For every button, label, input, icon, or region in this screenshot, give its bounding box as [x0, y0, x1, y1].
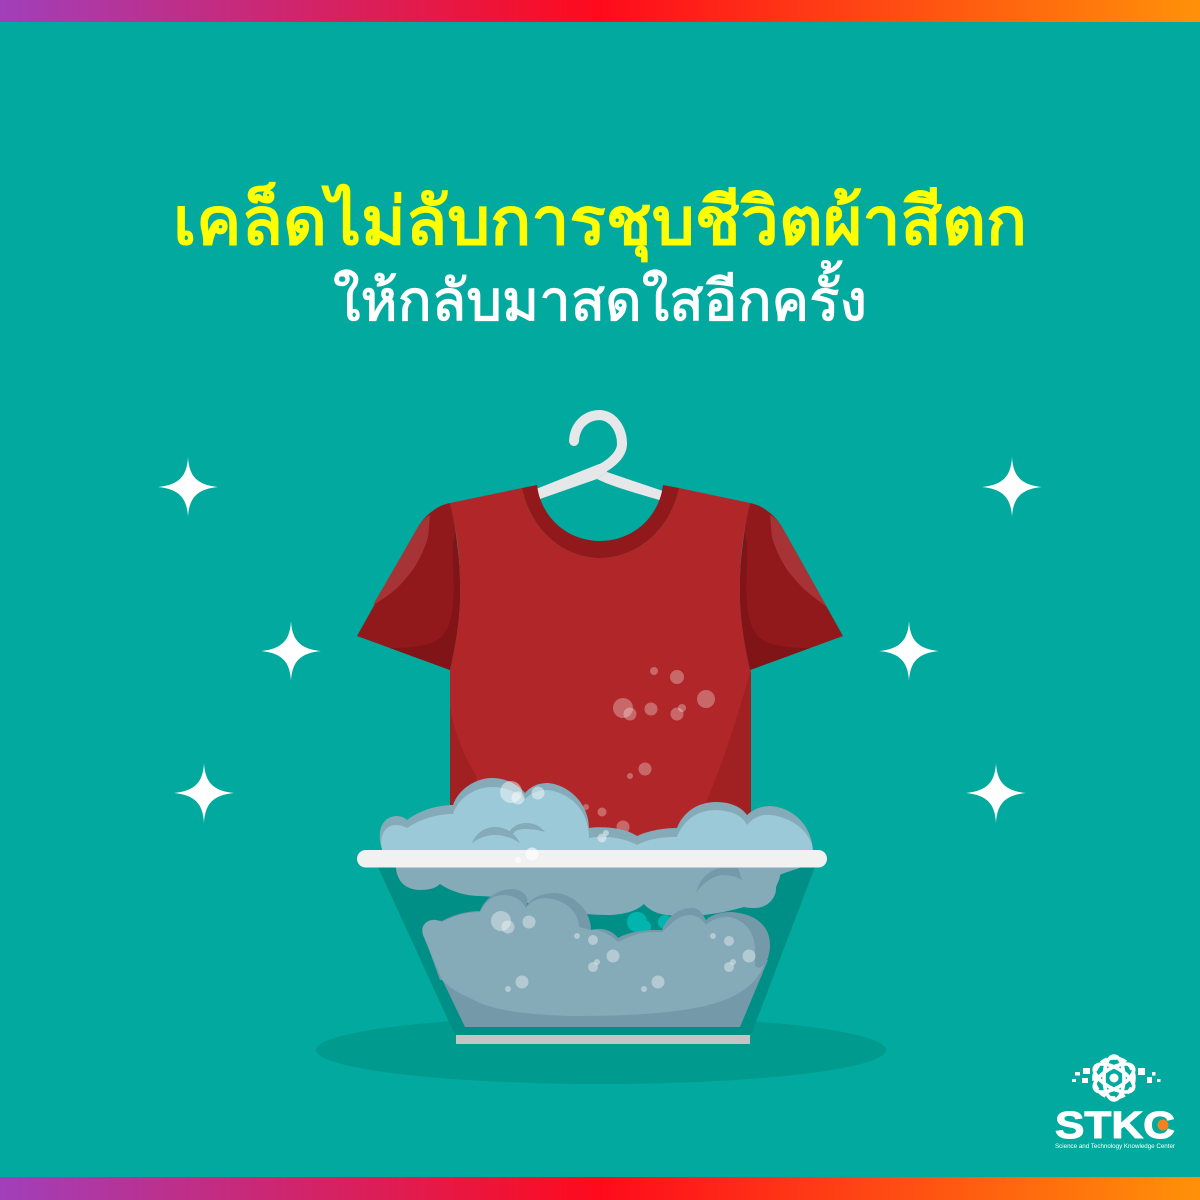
icon: clothes hanger [536, 415, 666, 501]
right body shadow [700, 669, 751, 830]
left body shadow [450, 707, 477, 810]
water foam main [422, 895, 765, 1016]
left sleeve shadow [390, 533, 460, 670]
right sleeve [740, 503, 843, 670]
upper foam bubbles [500, 781, 609, 842]
left sleeve highlight [373, 515, 430, 605]
title line 1: เคล็ดไม่ลับการชุบชีวิตผ้าสีตก [173, 181, 1027, 263]
upper foam main [381, 787, 813, 852]
hanger left arm [536, 464, 607, 499]
upper foam outline [380, 778, 813, 852]
stain bubbles on shirt [583, 667, 715, 834]
right sleeve shadow [740, 533, 810, 670]
hanger right arm [597, 472, 666, 501]
basin base [456, 1035, 750, 1044]
bottom gradient bar [0, 1177, 1200, 1200]
foam under rim [396, 860, 801, 916]
sparkles [158, 457, 1042, 823]
top gradient bar [0, 0, 1200, 22]
logo wordmark: STKC [1055, 1105, 1175, 1147]
right sleeve highlight [770, 515, 827, 607]
basin body [378, 867, 815, 1035]
water foam bubbles [491, 911, 756, 992]
basin rim [357, 850, 827, 868]
t-shirt [357, 485, 843, 900]
foam swirl right [509, 823, 545, 834]
logo: STKC [1055, 1056, 1175, 1150]
icon: atom [1090, 1056, 1138, 1100]
upper foam [380, 778, 813, 852]
title line 2: ให้กลับมาสดใสอีกครั้ง [333, 261, 867, 332]
floor shadow [316, 1016, 886, 1084]
rim bubbles [515, 848, 538, 863]
logo orange dot [1158, 1120, 1168, 1130]
left sleeve [357, 503, 460, 670]
teal bubbles in basin [627, 912, 672, 934]
title [173, 181, 1027, 332]
water in basin [440, 960, 768, 1027]
atom nucleus [1110, 1074, 1118, 1082]
foam swirl left [472, 827, 520, 843]
logo pixel squares [1072, 1068, 1160, 1083]
logo tagline: Science and Technology Knowledge Center [1055, 1144, 1175, 1150]
water foam [422, 889, 770, 1016]
collar [522, 485, 679, 558]
foam swirl under rim [696, 868, 742, 893]
shirt body [450, 488, 751, 900]
water foam shadow [422, 889, 770, 1000]
hanger hook [574, 415, 622, 469]
